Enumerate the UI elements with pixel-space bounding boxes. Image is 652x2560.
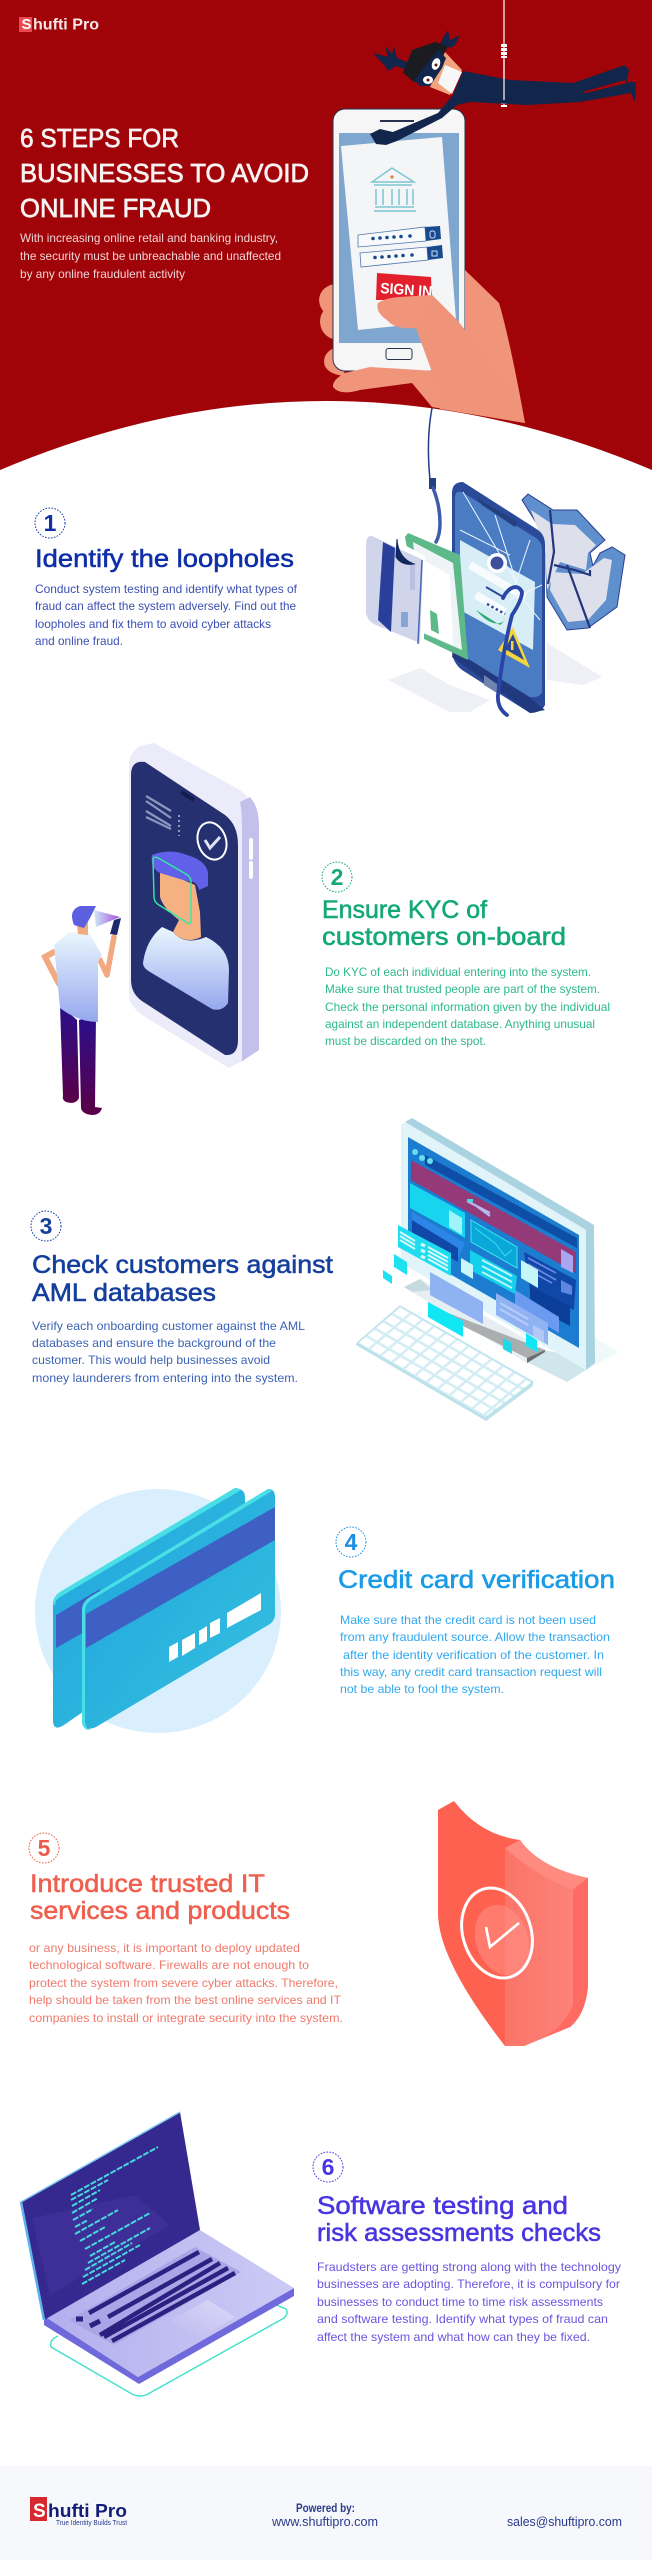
text: step 3: customer. This would help businesses avoid xyxy=(32,1353,270,1367)
step number 2 xyxy=(322,862,352,892)
text: step 6: businesses are adopting. Therefore, it is compulsory for xyxy=(317,2277,620,2291)
text: step 4: Make sure that the credit card is not been used xyxy=(340,1613,596,1627)
logo: S xyxy=(22,16,32,33)
title: 6 STEPS FOR xyxy=(20,123,179,153)
text: step 1: fraud can affect the system adversely. Find out the xyxy=(35,599,296,613)
laptop screen xyxy=(21,2112,200,2320)
powered by xyxy=(271,2503,378,2529)
text: step 1: Conduct system testing and identify what types of xyxy=(35,582,298,596)
keyboard xyxy=(357,1306,533,1418)
heading: step 2: Ensure KYC of xyxy=(322,896,487,924)
illustration: smartphone xyxy=(333,109,465,371)
floating panels xyxy=(383,1225,559,1354)
icon: check mark in circle xyxy=(450,1879,544,1987)
text: step 2 xyxy=(325,965,610,1048)
broken shield xyxy=(522,494,625,630)
heading: step 5: Introduce trusted IT xyxy=(30,1870,265,1898)
text: step 1 xyxy=(35,582,298,648)
sign in button: SIGN IN xyxy=(380,280,433,301)
interface lines xyxy=(146,796,179,836)
text: step 6 xyxy=(317,2260,621,2344)
step number 6 xyxy=(313,2152,343,2182)
text: step 5: companies to install or integrate security into the system. xyxy=(29,2011,343,2025)
heading: step 4: Credit card verification xyxy=(338,1566,615,1594)
keyboard bars xyxy=(76,2252,235,2341)
subtitle: the security must be unbreachable and unaffected xyxy=(20,249,281,263)
step number 1 xyxy=(35,508,65,538)
code lines xyxy=(71,2147,158,2284)
text: step 5: or any business, it is important to deploy updated xyxy=(29,1941,300,1955)
subtitle xyxy=(20,231,281,281)
footer logo: hufti Pro xyxy=(48,2501,127,2521)
step number 3 xyxy=(31,1211,61,1241)
icon: hand fingers behind phone xyxy=(319,283,345,376)
text: step 6: businesses to conduct time to time risk assessments xyxy=(317,2295,603,2309)
text: step 4: from any fraudulent source. Allow the transaction xyxy=(340,1630,610,1644)
text: step 6: affect the system and what how can they be fixed. xyxy=(317,2330,590,2344)
footer logo xyxy=(30,2497,127,2527)
warning sign xyxy=(498,627,530,668)
panel: step 4 xyxy=(35,1488,615,1733)
subtitle: by any online fraudulent activity xyxy=(20,267,185,281)
heading: step 1: Identify the loopholes xyxy=(35,545,294,573)
text: step 6: Fraudsters are getting strong along with the technology xyxy=(317,2260,621,2274)
text: step 1: loopholes and fix them to avoid cyber attacks xyxy=(35,617,271,631)
text: step 5: protect the system from severe cyber attacks. Therefore, xyxy=(29,1976,338,1990)
text: step 5 xyxy=(29,1941,343,2025)
fishing line xyxy=(428,408,432,480)
text: step 2: against an independent database. Anything unusual xyxy=(325,1017,595,1031)
heading: step 2: customers on-board xyxy=(322,923,566,951)
login fields xyxy=(358,226,443,267)
illustration: face recognition phone xyxy=(129,743,259,1068)
step number 3: 3 xyxy=(40,1213,52,1239)
illustration: thief xyxy=(370,0,636,145)
text: step 5: help should be taken from the best online services and IT xyxy=(29,1993,342,2007)
step number 2: 2 xyxy=(331,864,343,890)
heading: step 3: Check customers against xyxy=(32,1251,333,1279)
logo: hufti Pro xyxy=(33,16,99,34)
illustration: credit cards xyxy=(35,1488,281,1733)
panel: step 5 xyxy=(29,1801,588,2046)
text: step 3: money launderers from entering into the system. xyxy=(32,1371,298,1385)
heading: step 6 xyxy=(317,2192,601,2247)
icon: bank xyxy=(372,168,416,211)
illustration: person scanning face xyxy=(45,906,121,1115)
sign in button xyxy=(376,273,433,301)
text: step 3: databases and ensure the background of the xyxy=(32,1336,276,1350)
title: ONLINE FRAUD xyxy=(20,193,211,223)
icon: hand and thumb xyxy=(333,270,525,423)
screen xyxy=(408,1137,579,1348)
text: step 4 xyxy=(340,1613,610,1696)
title xyxy=(20,123,309,223)
icon: check mark xyxy=(193,819,231,863)
title: BUSINESSES TO AVOID xyxy=(20,158,309,188)
string xyxy=(503,0,505,107)
illustration: hooked phone xyxy=(366,478,625,715)
panel: step 3 xyxy=(31,1118,618,1421)
powered by: Powered by: xyxy=(296,2503,355,2515)
illustration: computer and keyboard xyxy=(356,1118,618,1421)
text: step 6: and software testing. Identify what types of fraud can xyxy=(317,2312,608,2326)
text: step 3: Verify each onboarding customer against the AML xyxy=(32,1319,305,1333)
step number 5 xyxy=(29,1833,59,1863)
illustration: laptop with code xyxy=(21,2112,294,2396)
illustration: security shield xyxy=(438,1801,588,2046)
heading: step 5: services and products xyxy=(30,1897,290,1925)
text: step 3 xyxy=(32,1319,305,1385)
powered by: www.shuftipro.com xyxy=(271,2514,378,2529)
subtitle: With increasing online retail and banking industry, xyxy=(20,231,278,245)
panel: step 2 xyxy=(45,743,610,1115)
heading: step 6: risk assessments checks xyxy=(317,2219,601,2247)
white arc xyxy=(0,401,652,480)
text: step 4: after the identity verification of the customer. In xyxy=(343,1648,604,1662)
monitor xyxy=(405,1118,594,1230)
email: sales@shuftipro.com xyxy=(507,2514,622,2529)
heading: step 6: Software testing and xyxy=(317,2192,568,2220)
heading: step 5 xyxy=(30,1870,290,1925)
panel: step 6 xyxy=(21,2112,621,2396)
laptop base xyxy=(44,2288,294,2384)
heading: step 2 xyxy=(322,896,566,951)
step number 4 xyxy=(336,1527,366,1557)
step number 6: 6 xyxy=(322,2154,334,2180)
text: step 5: technological software. Firewalls are not enough to xyxy=(29,1958,309,1972)
step number 4: 4 xyxy=(345,1529,358,1555)
panel: footer xyxy=(0,2466,652,2560)
heading: step 3: AML databases xyxy=(32,1279,216,1307)
text: step 2: Check the personal information given by the individual xyxy=(325,1000,610,1014)
icon: hook xyxy=(396,478,522,715)
text: step 2: must be discarded on the spot. xyxy=(325,1034,486,1048)
text: step 1: and online fraud. xyxy=(35,634,123,648)
text: step 4: this way, any credit card transaction request will xyxy=(340,1665,602,1679)
heading: step 3 xyxy=(32,1251,333,1307)
phone body xyxy=(452,482,545,713)
text: step 2: Do KYC of each individual entering into the system. xyxy=(325,965,591,979)
text: step 2: Make sure that trusted people are part of the system. xyxy=(325,982,600,996)
panel: hero header xyxy=(0,0,652,480)
footer logo: S xyxy=(33,2501,46,2522)
step number 1: 1 xyxy=(44,510,57,536)
panel: step 1 xyxy=(35,478,625,715)
text: step 4: not be able to fool the system. xyxy=(340,1682,504,1696)
portrait xyxy=(143,852,229,1010)
stand xyxy=(404,1279,545,1363)
step number 5: 5 xyxy=(38,1835,51,1861)
credit cards xyxy=(366,533,468,660)
footer logo: True Identity Builds Trust xyxy=(56,2520,127,2527)
